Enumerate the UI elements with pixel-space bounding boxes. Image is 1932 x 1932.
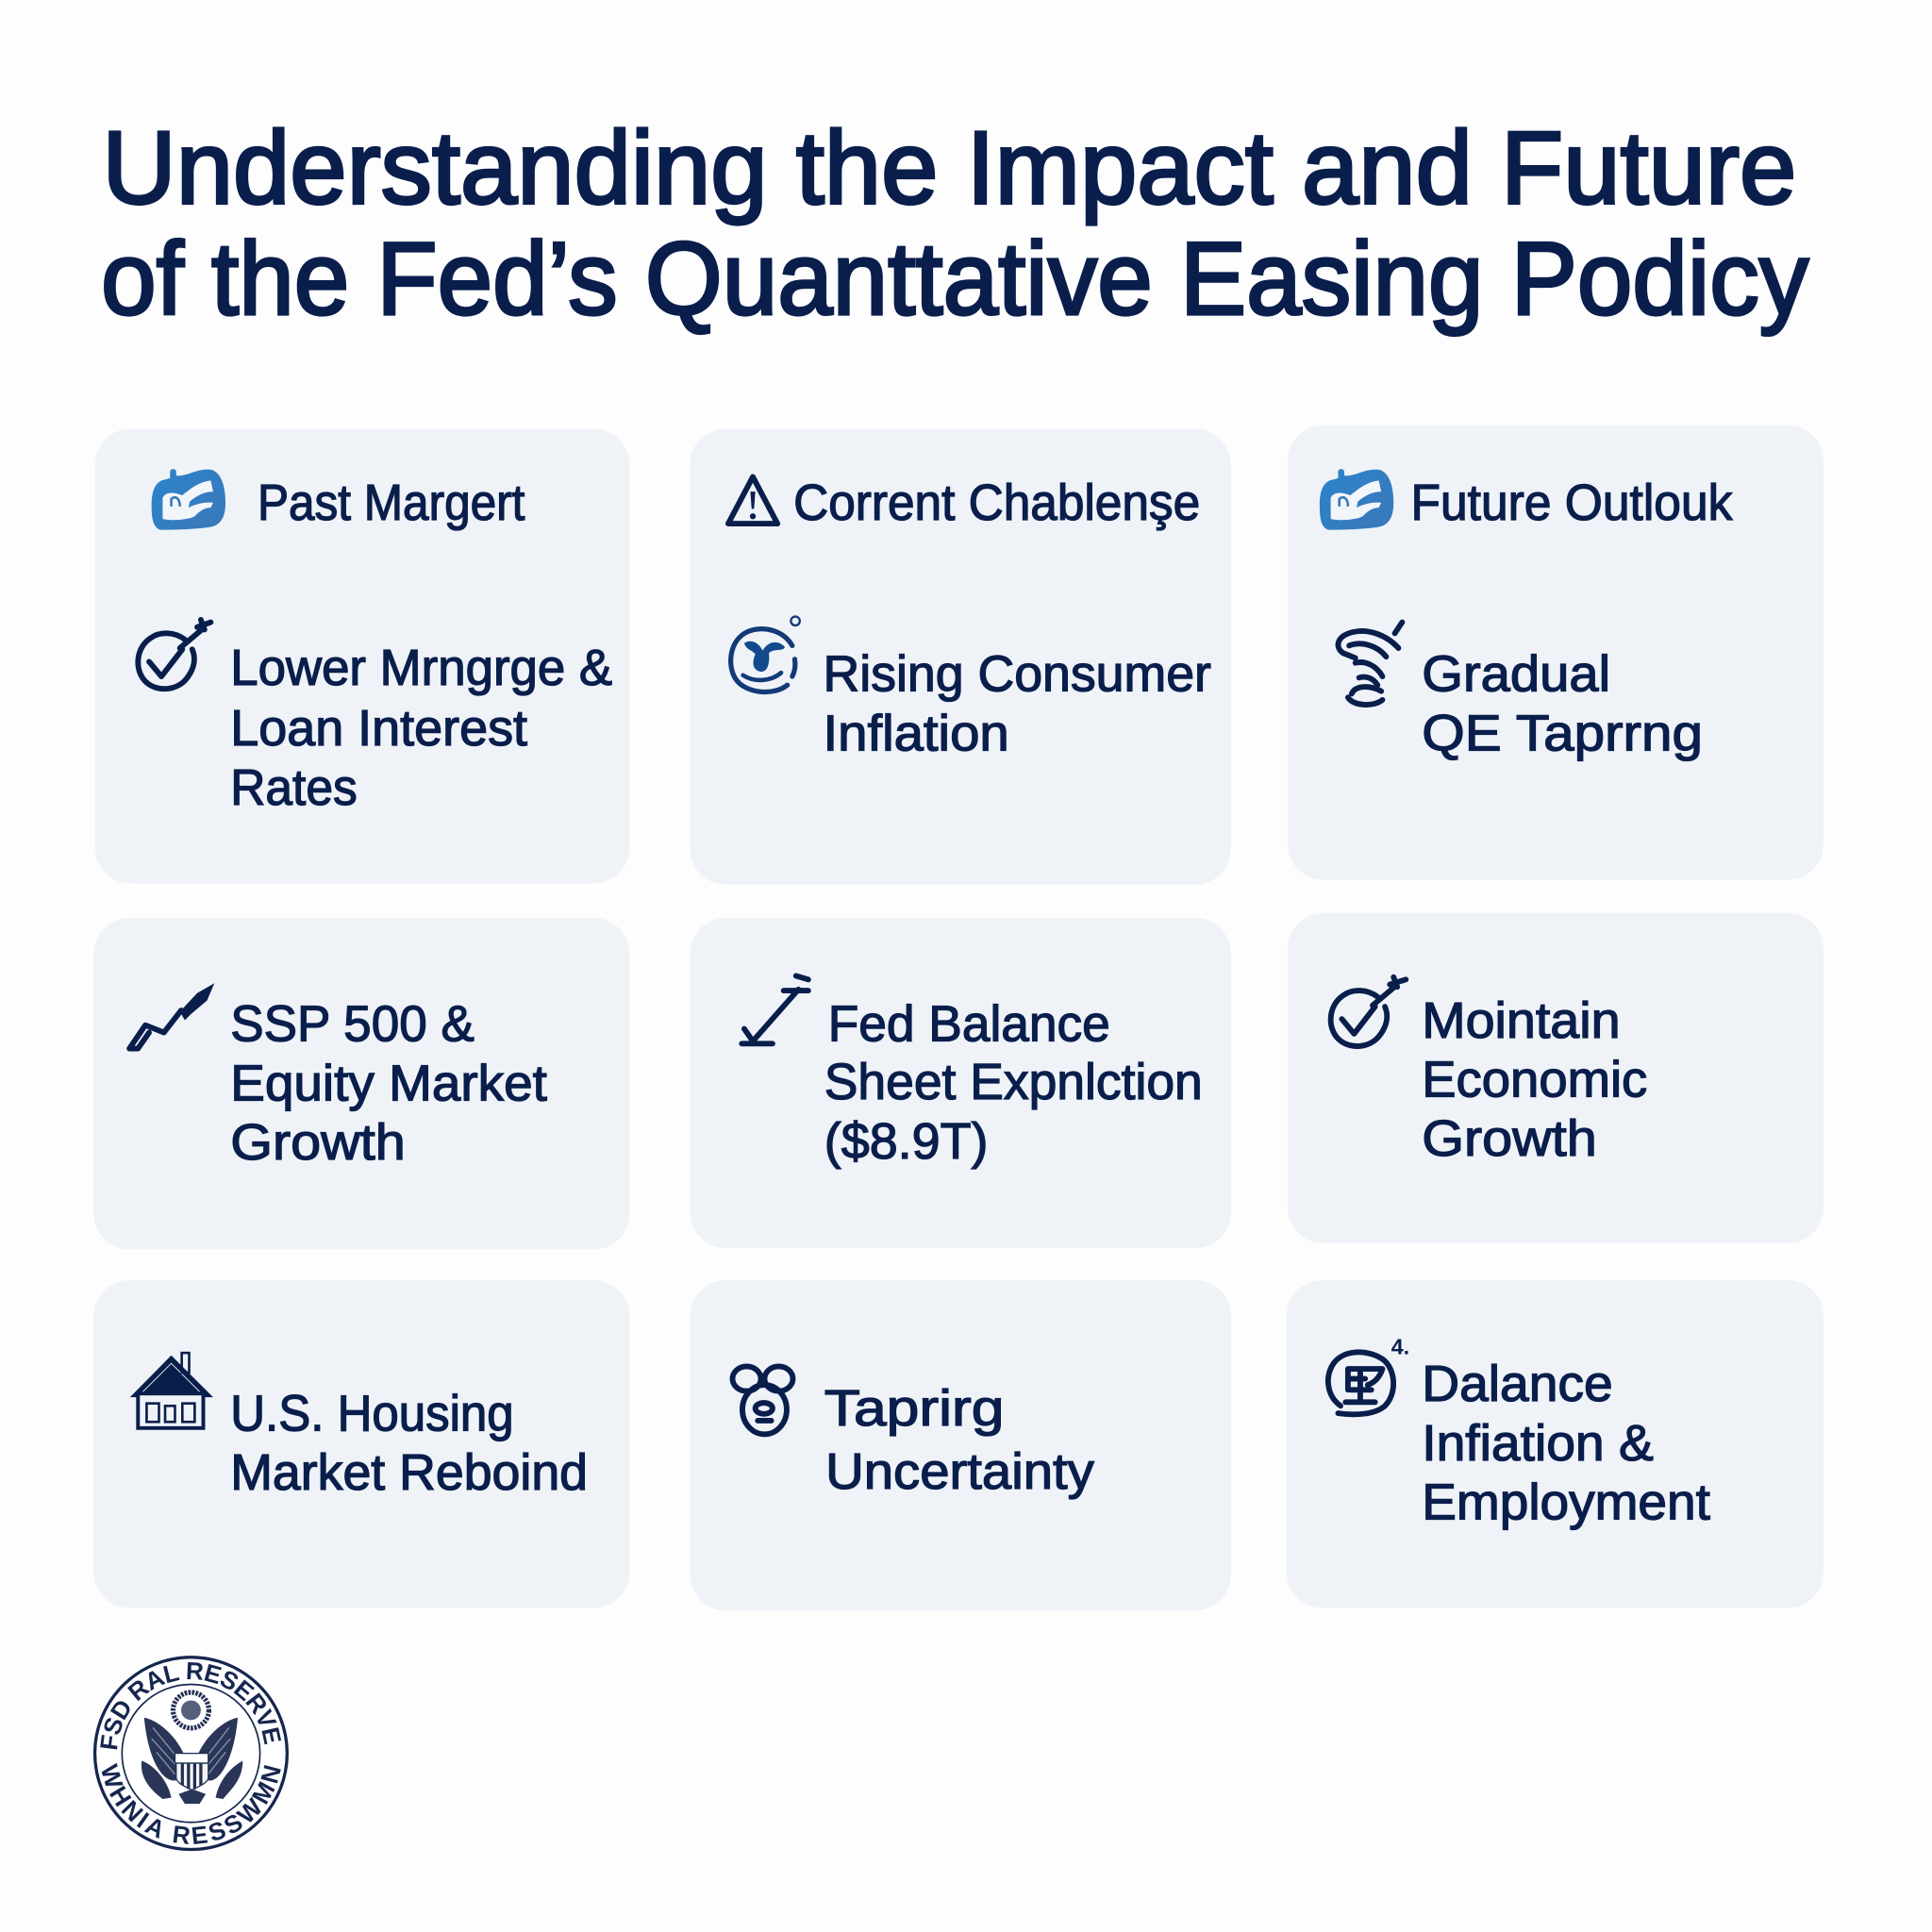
text: rising consumer inflation: Inflation xyxy=(823,706,1009,761)
text: tapering uncertainty xyxy=(824,1381,1094,1500)
text: tapering uncertainty: Taprirg xyxy=(824,1381,1004,1437)
text: maintain economic growth: Mointain xyxy=(1422,993,1621,1049)
text: gradual QE tapering: Gradual xyxy=(1422,647,1610,703)
text: S&P 500 and equity market growth: Equity Market xyxy=(230,1056,547,1111)
title xyxy=(101,111,1809,337)
panel: balance inflation and employment xyxy=(1287,1280,1824,1607)
icon: federal reserve seal: FSD RAL RESERVE xyxy=(100,1662,281,1749)
icon: balance ring xyxy=(1328,1334,1409,1414)
text: U.S. housing market rebound: U.S. Housing xyxy=(230,1386,514,1441)
text: tapering uncertainty: Uncertainty xyxy=(825,1444,1094,1500)
heading: future outlook: Future Outlouk xyxy=(1411,475,1733,531)
text: fed balance sheet expansion amount: Fed Balance xyxy=(828,997,1110,1053)
icon: rising chart with pen xyxy=(129,983,214,1049)
icon: warning triangle xyxy=(728,476,777,524)
text: U.S. housing market rebound: Market Reboind xyxy=(230,1445,588,1501)
text: fed balance sheet expansion amount: Sheet Expnlction xyxy=(824,1055,1203,1110)
panel: U.S. housing market rebound xyxy=(93,1280,629,1607)
panel: S&P 500 equity growth xyxy=(93,918,629,1249)
icon: blue future outlook badge xyxy=(1320,469,1393,530)
icon: check circle with pen xyxy=(138,620,210,689)
text: gradual QE tapering: QE Taprrng xyxy=(1422,706,1703,761)
text: maintain economic growth: Growth xyxy=(1422,1111,1597,1167)
text: fed balance sheet expansion amount xyxy=(824,997,1203,1170)
panel: tapering uncertainty xyxy=(690,1280,1231,1610)
icon: inflation face ring xyxy=(731,617,800,692)
text: balance inflation and employment: Employment xyxy=(1422,1474,1710,1530)
icon: check circle with pen xyxy=(1331,977,1406,1046)
icon: federal reserve seal xyxy=(92,1656,289,1851)
text: lower mortgage and loan interest rates: Loan Interest xyxy=(230,701,527,757)
text: fed balance sheet expansion amount: ($8.9T) xyxy=(824,1114,989,1170)
icon: balance sheet check arrow xyxy=(741,975,808,1043)
icon: house xyxy=(130,1353,213,1428)
panel: fed balance sheet expansion xyxy=(690,918,1231,1248)
text: lower mortgage and loan interest rates: Rates xyxy=(230,760,358,816)
icon: balance ring: 4. xyxy=(1391,1334,1409,1358)
heading: past market: Past Margert xyxy=(258,475,525,531)
crest xyxy=(174,1692,208,1728)
heading: current challenge: Corrent Chablenşe xyxy=(793,475,1200,531)
panel: maintain economic growth xyxy=(1288,913,1824,1243)
title: Understanding the Impact and Future xyxy=(102,111,1796,226)
text: rising consumer inflation xyxy=(823,647,1211,761)
text: balance inflation and employment xyxy=(1422,1357,1710,1530)
icon: federal reserve seal: WHNIA RESSWMN xyxy=(102,1762,281,1844)
text: balance inflation and employment: Dalance xyxy=(1422,1357,1613,1412)
text: maintain economic growth xyxy=(1422,993,1647,1167)
olive branches and tail xyxy=(142,1760,242,1804)
shield xyxy=(175,1754,208,1790)
icon: uncertainty face xyxy=(732,1366,792,1434)
title: of the Fed’s Quanttative Easing Podicy xyxy=(101,222,1809,337)
text: S&P 500 and equity market growth xyxy=(230,997,547,1171)
eagle wings xyxy=(144,1718,238,1781)
text: balance inflation and employment: Infiation & xyxy=(1422,1416,1654,1472)
text: gradual QE tapering xyxy=(1422,647,1703,761)
panel: future outlook header and gradual tapering xyxy=(1288,425,1824,880)
panel: current challenge header and rising inflation xyxy=(690,429,1231,885)
panel: past market header and mortgage rates xyxy=(95,429,629,883)
icon: tapering waves xyxy=(1338,623,1402,705)
text: lower mortgage and loan interest rates: Lower Mrngrge & xyxy=(230,641,612,696)
icon: blue past market badge xyxy=(152,469,225,530)
text: U.S. housing market rebound xyxy=(230,1386,588,1501)
text: lower mortgage and loan interest rates xyxy=(230,641,612,816)
text: S&P 500 and equity market growth: Growth xyxy=(230,1115,406,1171)
text: maintain economic growth: Economic xyxy=(1422,1052,1647,1108)
text: rising consumer inflation: Rising Consumer xyxy=(823,647,1211,703)
text: S&P 500 and equity market growth: SSP 500 & xyxy=(230,997,475,1053)
